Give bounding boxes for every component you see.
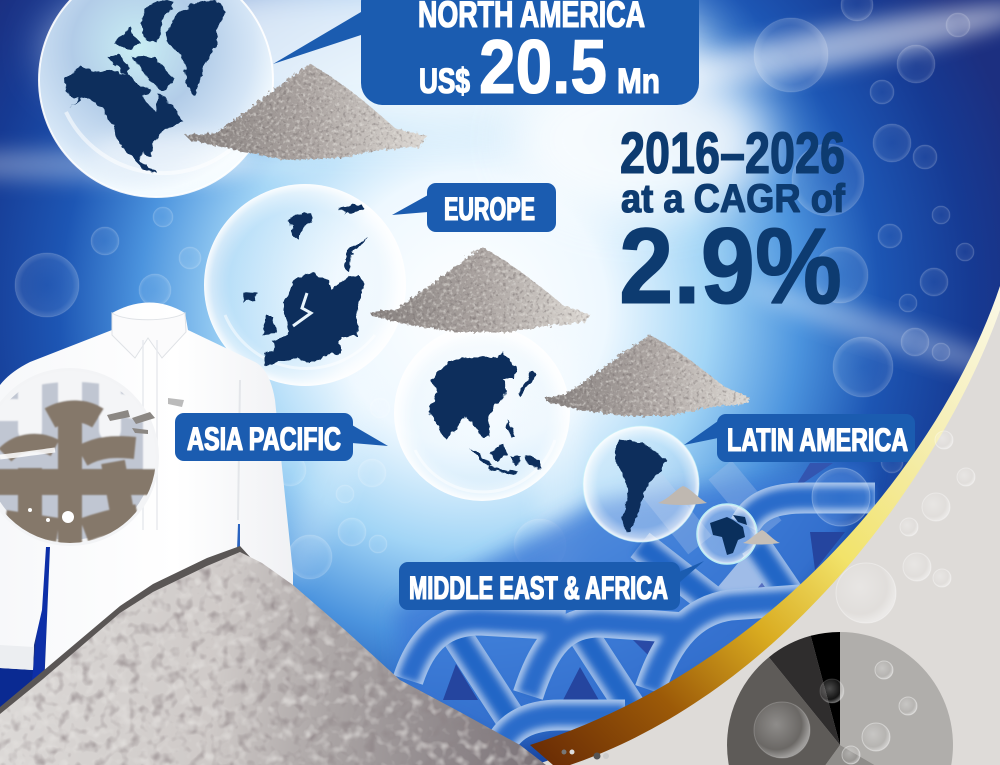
beige panel and gold band xyxy=(530,286,1000,765)
CAGR statement: 2016–2026 xyxy=(620,121,845,186)
value: US$ 20.5 Mn: Mn xyxy=(617,62,660,101)
powder pile: Europe xyxy=(370,247,591,332)
callout: Europe: EUROPE xyxy=(444,191,535,227)
background small bubbles xyxy=(15,0,974,579)
map: South America xyxy=(615,440,667,533)
large powder pile xyxy=(0,546,546,765)
callout: Middle East and Africa: MIDDLE EAST & AFRICA xyxy=(409,570,668,606)
callout: North America xyxy=(273,0,699,110)
weave diagonal strands xyxy=(448,470,796,730)
powder pile: Latin America xyxy=(658,486,707,505)
callout: Asia Pacific xyxy=(175,413,388,461)
weave curved strands xyxy=(408,498,875,750)
map: North America xyxy=(65,0,227,175)
map: Africa xyxy=(710,515,747,555)
value: US$ 20.5 Mn xyxy=(419,25,660,110)
bubble: Middle East and Africa xyxy=(697,504,757,564)
callout: Asia Pacific: ASIA PACIFIC xyxy=(187,421,341,457)
bubble: North America xyxy=(39,0,273,197)
fabric magnifier circle xyxy=(0,368,184,546)
callout: Latin America xyxy=(684,414,915,462)
map: Asia xyxy=(427,353,540,474)
powder pile: North America xyxy=(185,64,428,160)
background light rays xyxy=(0,0,1000,600)
powder pile: Asia Pacific xyxy=(545,335,751,416)
pie bubbles xyxy=(754,661,917,764)
weave gaps xyxy=(443,463,845,702)
panel bubbles xyxy=(836,431,975,623)
pie chart xyxy=(727,632,953,765)
callout: Europe xyxy=(392,183,556,232)
callout: Latin America: LATIN AMERICA xyxy=(727,422,908,458)
small dots at band foot xyxy=(562,750,609,760)
CAGR statement xyxy=(619,121,846,326)
bubble: Latin America xyxy=(583,426,699,542)
shirt collar xyxy=(112,313,186,358)
white shirt xyxy=(0,302,293,715)
bubble: Asia Pacific xyxy=(394,325,570,501)
map: Europe xyxy=(243,204,367,365)
stained brown fibres xyxy=(0,411,160,545)
CAGR statement: 2.9% xyxy=(619,205,842,326)
woven fibre illustration xyxy=(395,463,875,750)
powder pile: Middle East and Africa xyxy=(743,530,780,544)
bubble: Europe xyxy=(204,184,406,386)
callout: Middle East and Africa xyxy=(399,561,704,610)
dirt flakes xyxy=(107,398,184,434)
value: US$ 20.5 Mn: US$ xyxy=(419,62,470,101)
white clean fibres xyxy=(0,368,160,470)
value: US$ 20.5 Mn: 20.5 xyxy=(479,25,607,110)
CAGR statement: at a CAGR of xyxy=(621,177,846,221)
